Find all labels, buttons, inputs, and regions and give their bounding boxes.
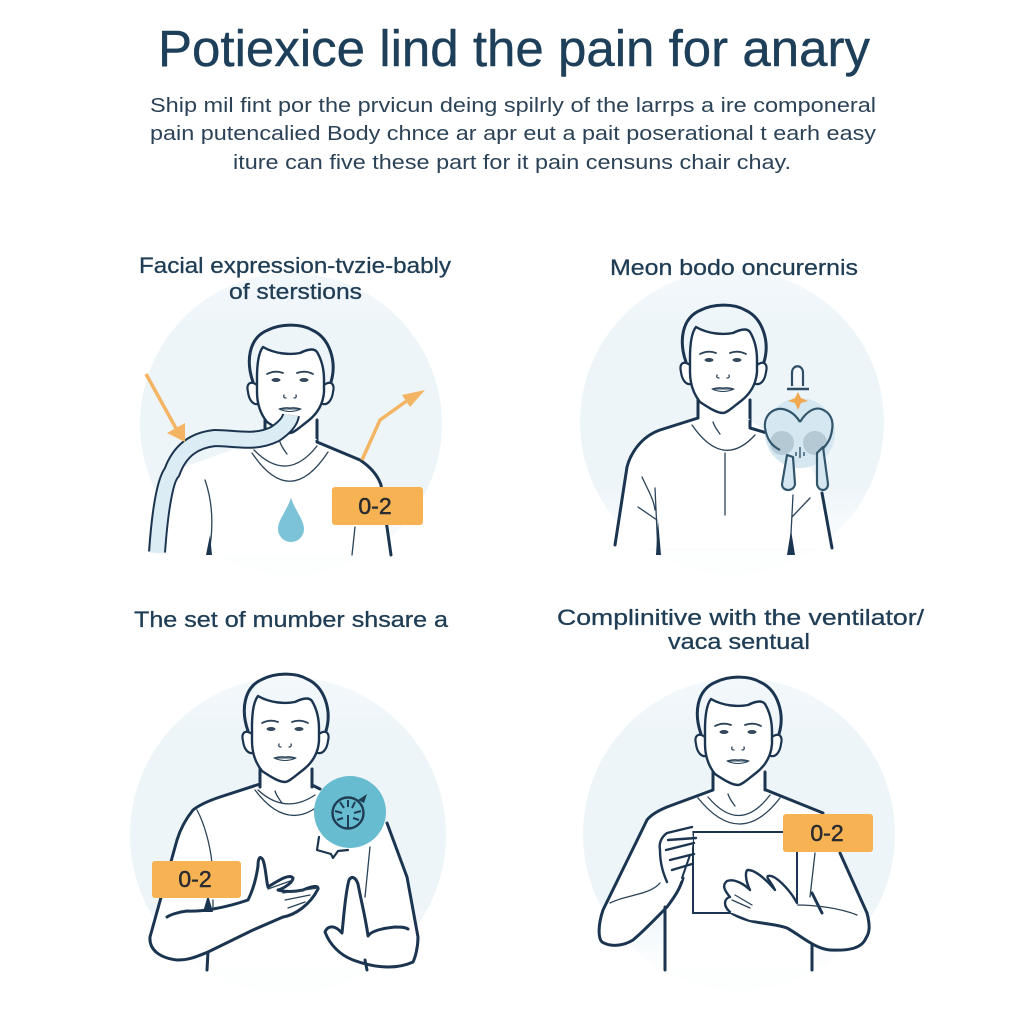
title: Potiexice lind the pain for anary (158, 20, 870, 77)
intro text block: Ship mil fint por the prvicun deing spilrly of the larrps a ire componeral (150, 95, 876, 117)
panel heading: of sterstions (229, 279, 362, 304)
sleeve line (352, 527, 355, 555)
intro text block: iture can five these part for it pain censuns chair chay. (233, 152, 791, 174)
panel heading: Meon bodo oncurernis (610, 255, 858, 280)
intro text block (150, 95, 876, 174)
gauge icon (314, 776, 386, 858)
figure (599, 677, 869, 970)
panel heading (139, 253, 451, 304)
score badge (152, 861, 241, 898)
background circle (130, 677, 446, 993)
panel heading (557, 605, 925, 654)
panel heading: vaca sentual (668, 629, 810, 654)
breathing tube (157, 415, 291, 553)
figure (158, 325, 391, 555)
figure (150, 674, 418, 970)
arrow right (362, 390, 425, 460)
background circle (140, 273, 442, 575)
score badge: 0-2 (178, 866, 212, 892)
score badge (783, 814, 873, 852)
panel: number share (130, 607, 449, 993)
arrow left (146, 374, 185, 442)
score badge: 0-2 (810, 820, 844, 846)
panel heading: Facial expression-tvzie-bably (139, 253, 451, 278)
panel heading: Complinitive with the ventilator/ (557, 605, 925, 630)
panel: compliance with ventilator (557, 605, 925, 990)
intro text block: pain putencalied Body chnce ar apr eut a pait poserational t earh easy (150, 123, 876, 145)
score badge (332, 487, 423, 525)
figure (615, 305, 832, 555)
water drop icon (278, 498, 304, 542)
panel: body movement (580, 255, 884, 574)
organ illustration (765, 366, 835, 490)
panel heading: The set of mumber shsare a (134, 607, 449, 632)
background circle (580, 270, 884, 574)
score badge: 0-2 (358, 493, 392, 519)
panel: facial expression (139, 253, 451, 575)
paper sheet (693, 832, 797, 913)
background circle (583, 678, 895, 990)
